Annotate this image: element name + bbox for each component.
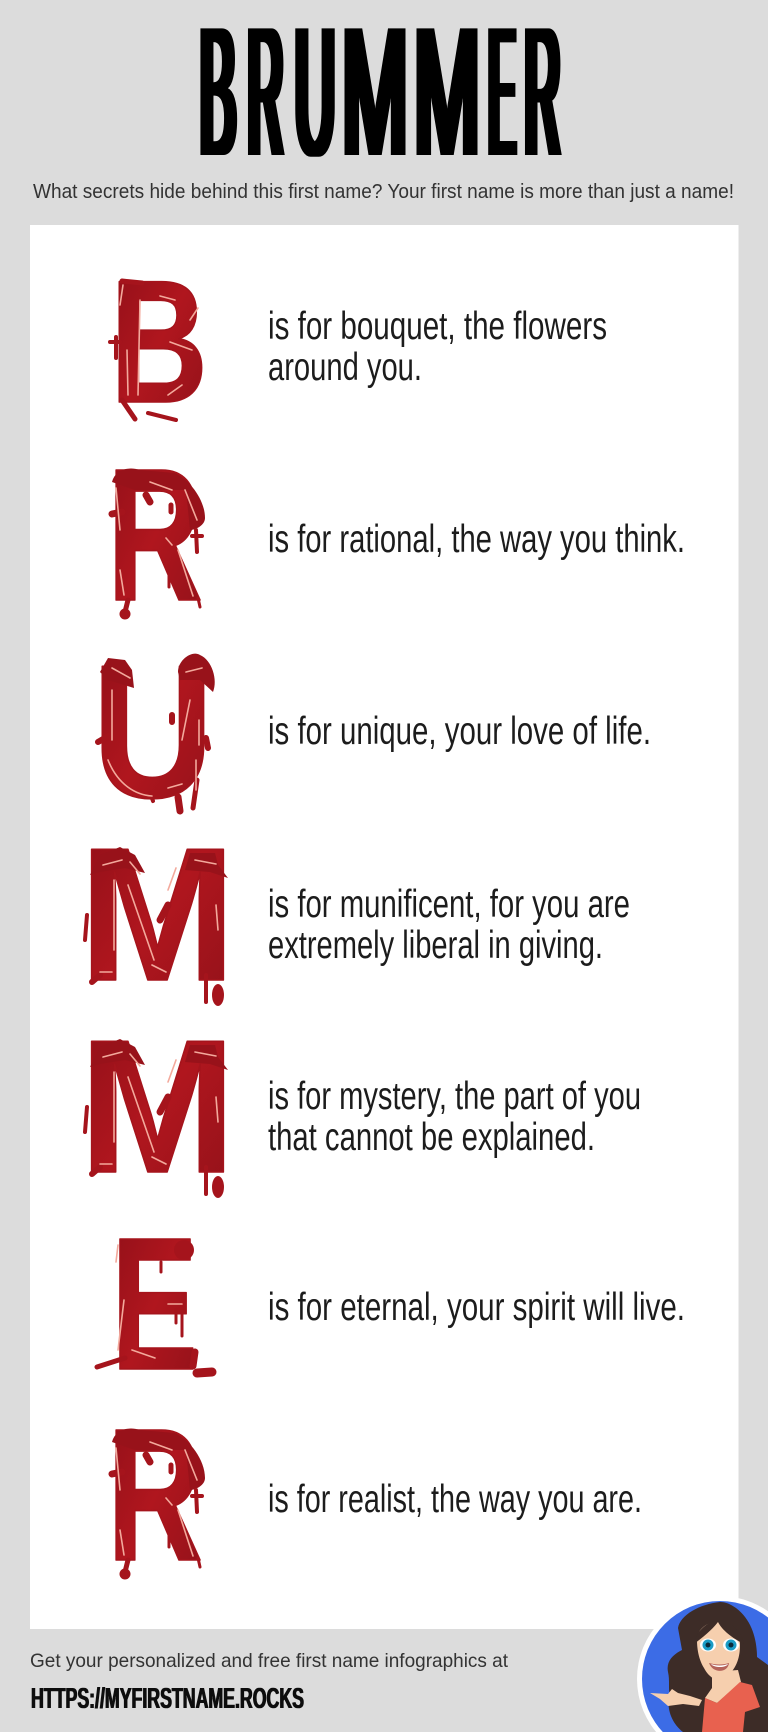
- footer text: Get your personalized and free first name infographics at: [30, 1650, 509, 1672]
- icon: blood letter R: R: [107, 1390, 203, 1601]
- icon: blood letter E: E: [111, 1199, 198, 1410]
- row: letter R: [107, 430, 685, 641]
- text: B meaning: around you.: [268, 346, 422, 389]
- row: letter E: [97, 1199, 685, 1410]
- text: R meaning (realist): is for realist, the way you are.: [268, 1478, 642, 1521]
- row: letter M second: [79, 1001, 641, 1213]
- text: M meaning (mystery): is for mystery, the part of you: [268, 1075, 641, 1118]
- icon: blood letter B: B: [110, 245, 208, 440]
- icon: blood letter M: M: [79, 809, 236, 1021]
- icon: blood letter R: R: [107, 430, 203, 641]
- text: U meaning: is for unique, your love of life.: [268, 710, 651, 753]
- row: letter U: [92, 626, 651, 838]
- footer url: HTTPS://MYFIRSTNAME.ROCKS: [31, 1683, 304, 1715]
- text: M meaning (munificent): [268, 883, 630, 967]
- title: [200, 0, 560, 194]
- subtitle: What secrets hide behind this first name? Your first name is more than just a name!: [33, 181, 734, 203]
- icon: blood letter U: U: [92, 626, 214, 838]
- icon: blood letter M: M: [79, 1001, 236, 1213]
- text: M meaning (munificent): extremely liberal in giving.: [268, 924, 603, 967]
- row: letter R second: [107, 1390, 642, 1601]
- text: B meaning: [268, 305, 607, 389]
- avatar: cartoon woman in circle: [637, 1596, 768, 1732]
- panel: letter meanings: [30, 225, 738, 1629]
- row: letter M: [79, 809, 630, 1021]
- text: M meaning (mystery): that cannot be explained.: [268, 1116, 595, 1159]
- text: M meaning (munificent): is for munificent, for you are: [268, 883, 630, 926]
- text: B meaning: is for bouquet, the flowers: [268, 305, 607, 348]
- row: letter B: [110, 245, 607, 440]
- text: M meaning (mystery): [268, 1075, 641, 1159]
